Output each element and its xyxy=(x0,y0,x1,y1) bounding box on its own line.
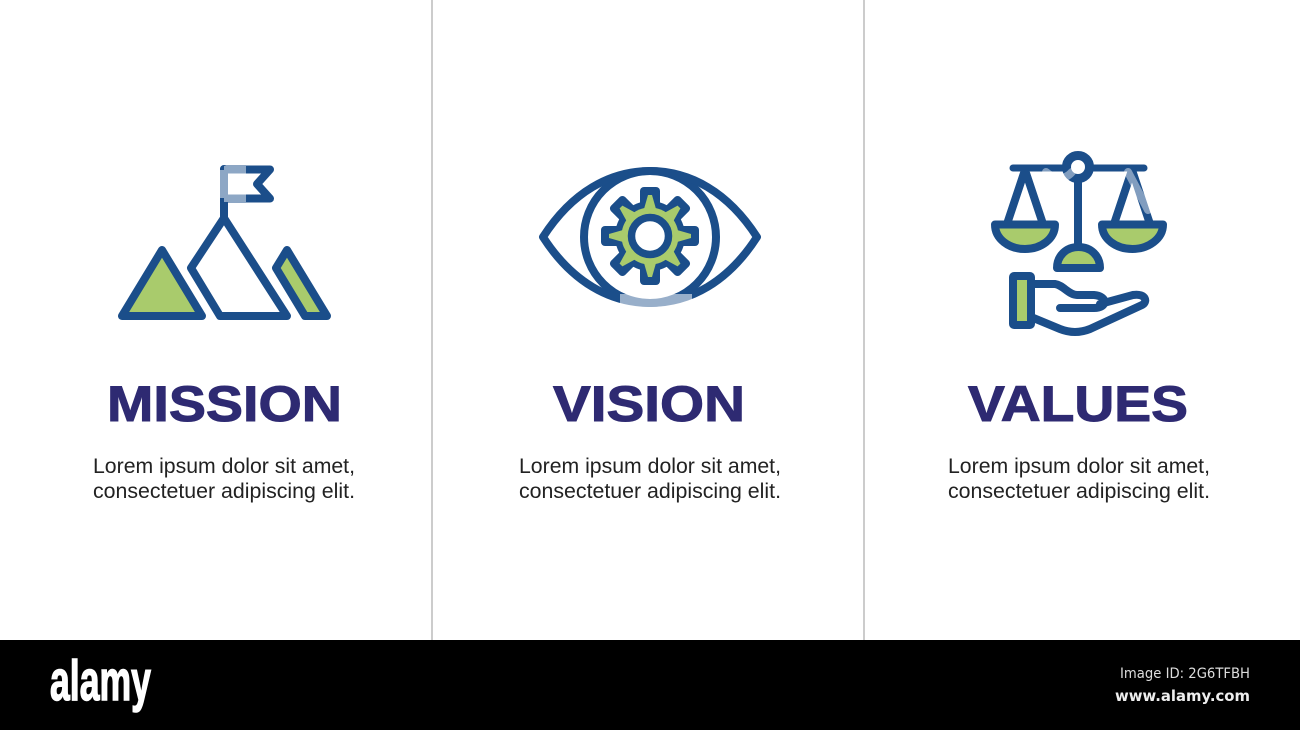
icon: eye with gear xyxy=(543,171,757,307)
image id: Image ID: 2G6TFBH xyxy=(1120,666,1250,682)
panel: mission xyxy=(93,169,355,503)
text block: vision description: consectetuer adipiscing elit. xyxy=(519,480,781,503)
text block: mission description: Lorem ipsum dolor sit amet, xyxy=(93,455,355,478)
logo: alamy: alamy xyxy=(50,649,151,713)
icon: mountains with flag xyxy=(122,169,327,316)
text block: values description: Lorem ipsum dolor sit amet, xyxy=(948,455,1210,478)
icon: scales over open hand xyxy=(995,156,1163,332)
heading: values: VALUES xyxy=(968,376,1188,432)
heading: vision: VISION xyxy=(553,376,745,432)
text block: vision description xyxy=(519,455,781,503)
heading: mission: MISSION xyxy=(107,376,342,432)
text block: mission description xyxy=(93,455,355,503)
panel: vision xyxy=(519,171,781,503)
text block: mission description: consectetuer adipiscing elit. xyxy=(93,480,355,503)
footer bar xyxy=(0,640,1300,730)
text block: values description xyxy=(948,455,1210,503)
panel: values xyxy=(948,156,1210,503)
text block: vision description: Lorem ipsum dolor sit amet, xyxy=(519,455,781,478)
website: www.alamy.com xyxy=(1115,687,1250,705)
text block: values description: consectetuer adipiscing elit. xyxy=(948,480,1210,503)
